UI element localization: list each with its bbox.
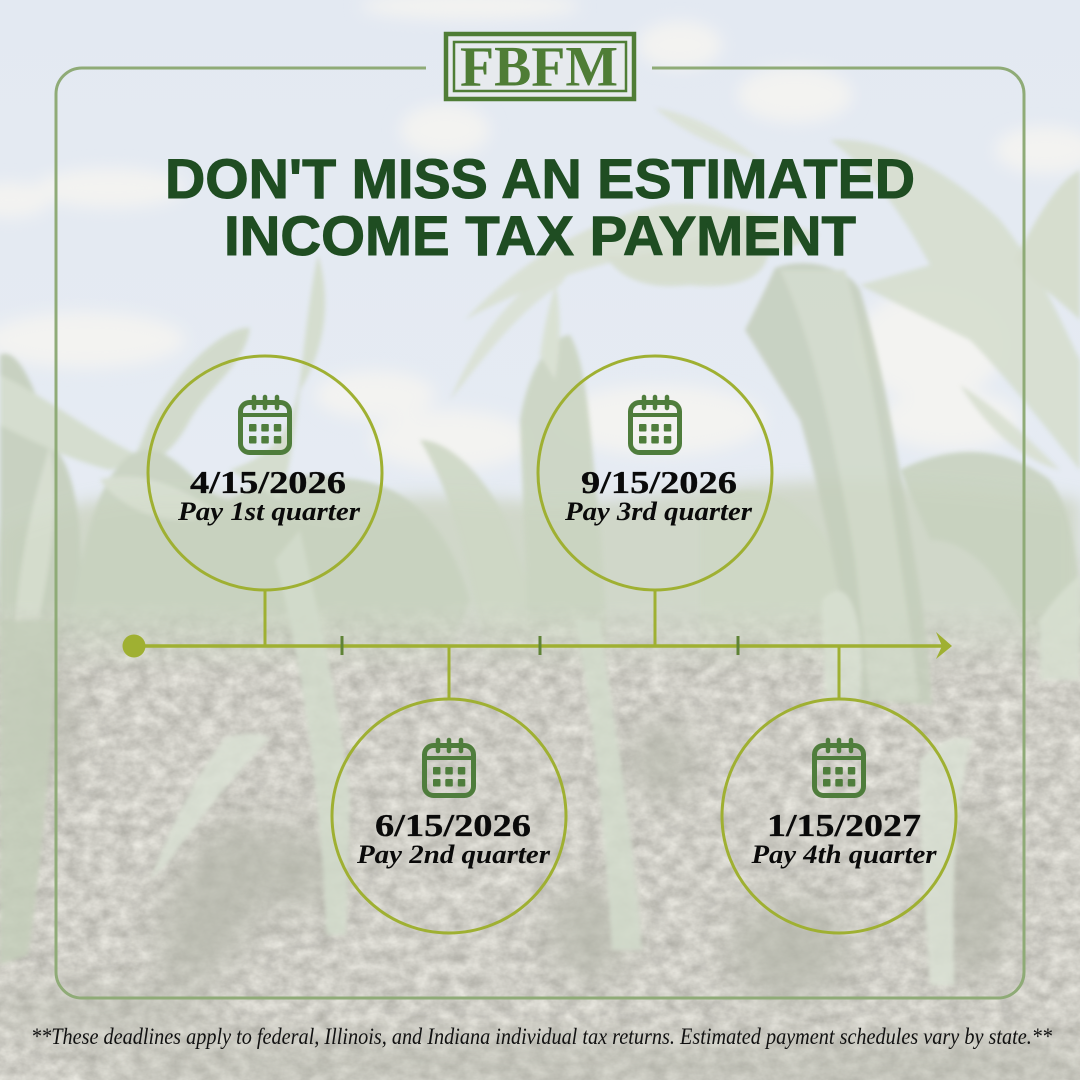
icon: calendar bbox=[424, 740, 474, 796]
milestone: 4th quarter bbox=[722, 699, 956, 933]
milestone: 4th quarter: 1/15/2027 bbox=[767, 807, 921, 843]
foreground stalks bbox=[0, 263, 1080, 985]
milestone: 2nd quarter bbox=[332, 699, 566, 933]
rear plant mass and corn leaves fading into the soil bbox=[0, 108, 1080, 680]
icon: calendar bbox=[814, 740, 864, 796]
title: INCOME TAX PAYMENT bbox=[224, 204, 856, 267]
milestone: 4th quarter: Pay 4th quarter bbox=[750, 840, 937, 869]
title: DON'T MISS AN ESTIMATED bbox=[165, 147, 915, 210]
milestone: 3rd quarter: Pay 3rd quarter bbox=[564, 497, 753, 526]
soil bbox=[0, 540, 1080, 1080]
milestone: 3rd quarter: 9/15/2026 bbox=[581, 464, 737, 500]
icon: calendar bbox=[630, 397, 680, 452]
milestone: 2nd quarter: Pay 2nd quarter bbox=[356, 840, 551, 869]
outer rounded frame bbox=[56, 68, 1024, 998]
milestone: 1st quarter: Pay 1st quarter bbox=[177, 497, 361, 526]
icon: calendar bbox=[240, 397, 290, 452]
milestone: 3rd quarter bbox=[538, 356, 772, 590]
milestone: 1st quarter bbox=[148, 356, 382, 590]
title bbox=[165, 147, 915, 267]
logo: FBFM: FBFM bbox=[460, 36, 618, 98]
milestone: 1st quarter: 4/15/2026 bbox=[190, 464, 346, 500]
timeline with start dot, ticks and arrow bbox=[122, 590, 952, 698]
milestone: 2nd quarter: 6/15/2026 bbox=[375, 807, 531, 843]
